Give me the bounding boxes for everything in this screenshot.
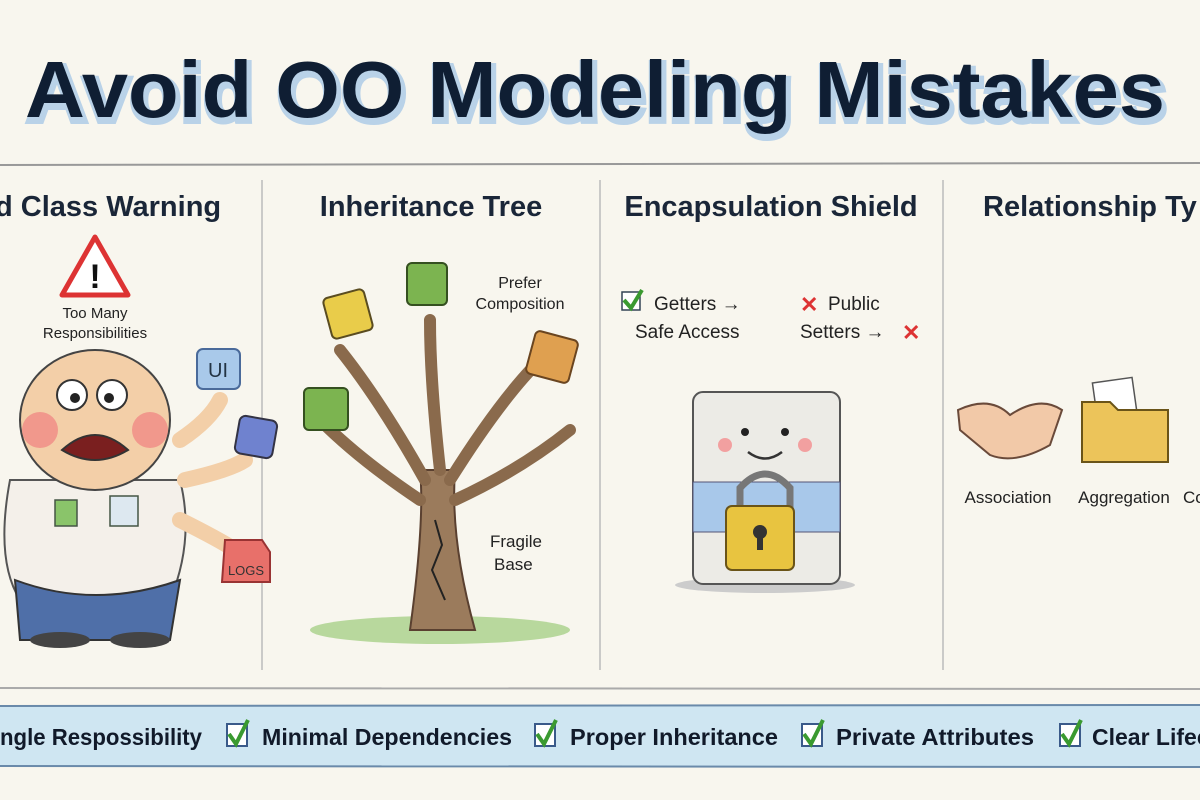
panel: encapsulation shield bbox=[622, 191, 920, 593]
panel: inheritance tree bbox=[304, 191, 579, 644]
banner: checklist: Private Attributes bbox=[836, 724, 1034, 750]
illustration: tree bbox=[304, 263, 579, 644]
banner: checklist bbox=[0, 705, 1200, 767]
panel: god class warning: Responsibilities bbox=[43, 325, 147, 342]
text: public setters bbox=[800, 292, 920, 345]
illustration: overloaded man bbox=[4, 349, 278, 648]
text: fragile base: Fragile bbox=[490, 532, 542, 551]
title: Avoid OO Modeling Mistakes bbox=[27, 49, 1167, 138]
puzzle pieces bbox=[322, 288, 374, 340]
text: public setters: ✕ bbox=[800, 292, 818, 317]
heading: god class: d Class Warning bbox=[0, 191, 221, 223]
text: public setters: Public bbox=[828, 294, 880, 315]
panel: relationship types: Aggregation bbox=[1078, 488, 1170, 507]
panel: god class warning bbox=[0, 191, 278, 648]
heading: inheritance tree: Inheritance Tree bbox=[320, 191, 542, 223]
illustration: box with lock bbox=[675, 392, 855, 593]
icon: handshake bbox=[958, 404, 1062, 458]
text: getters: Getters → bbox=[654, 294, 741, 315]
illustration: overloaded man: LOGS bbox=[228, 563, 264, 578]
text: getters: Safe Access bbox=[635, 322, 740, 343]
banner: checklist: Minimal Dependencies bbox=[262, 724, 512, 750]
icon: warning triangle bbox=[62, 237, 128, 296]
icon: folder bbox=[1082, 377, 1168, 462]
illustration: overloaded man: UI bbox=[208, 360, 228, 382]
heading: encapsulation: Encapsulation Shield bbox=[624, 191, 918, 223]
heading: relationship types: Relationship Ty bbox=[983, 191, 1197, 223]
text: getters bbox=[622, 290, 741, 343]
banner: checklist: Proper Inheritance bbox=[570, 724, 778, 750]
title: Avoid OO Modeling Mistakes bbox=[25, 45, 1165, 134]
panel: inheritance tree: Composition bbox=[476, 296, 564, 313]
text: prefer composition: Prefer bbox=[498, 275, 542, 292]
panel: relationship types bbox=[958, 191, 1200, 507]
labels: relationships: Association bbox=[965, 488, 1051, 507]
icon: warning triangle: ! bbox=[89, 258, 101, 296]
panel: inheritance tree: Base bbox=[494, 555, 533, 574]
text: too many responsibilities: Too Many bbox=[62, 305, 128, 322]
banner: checklist: ngle Respossibility bbox=[0, 724, 202, 750]
text: public setters: ✕ bbox=[902, 320, 920, 345]
text: public setters: Setters → bbox=[800, 322, 884, 343]
